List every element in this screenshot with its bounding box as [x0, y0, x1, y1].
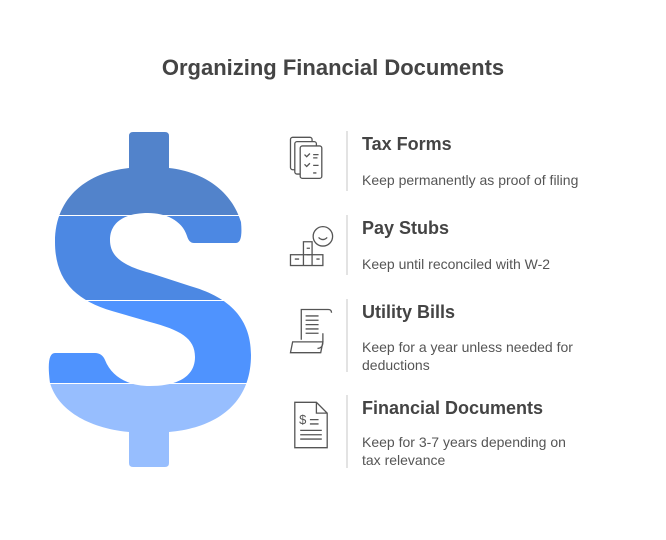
icon: financial documents: $ [299, 412, 306, 427]
item: financial documents: Financial Documents [362, 398, 543, 418]
item: tax forms: Tax Forms [362, 134, 452, 154]
icon: pay stubs [290, 226, 334, 266]
item: utility bills [346, 299, 592, 372]
item: utility bills: Keep for a year unless needed for deductions [362, 339, 573, 373]
band 4 [50, 384, 246, 467]
item: pay stubs: Pay Stubs [362, 218, 449, 238]
item: pay stubs: Keep until reconciled with W-2 [362, 256, 550, 272]
title: Organizing Financial Documents [162, 55, 504, 80]
band 1 [60, 132, 238, 215]
item: utility bills: Utility Bills [362, 302, 455, 322]
item: tax forms [346, 131, 592, 191]
dollar sign chart [48, 132, 251, 467]
icon: utility bills [290, 308, 332, 354]
band 2 [55, 216, 242, 300]
item: financial documents: Keep for 3-7 years depending on tax relevance [362, 434, 566, 468]
band 3 [40, 301, 260, 383]
icon: tax forms [290, 136, 322, 179]
item: financial documents [346, 395, 582, 468]
item: pay stubs [346, 215, 592, 275]
icon: financial documents [294, 402, 328, 448]
item: tax forms: Keep permanently as proof of filing [362, 172, 578, 188]
